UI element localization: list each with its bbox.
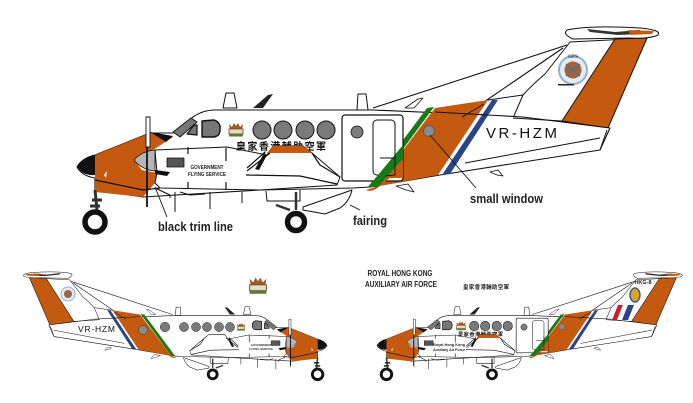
GFS tail badge: GFS — [568, 55, 578, 60]
callout: fairing: fairing — [353, 214, 387, 228]
tail badge — [61, 287, 75, 301]
Chinese heading: 皇家香港輔助空軍 — [463, 283, 509, 291]
wing orange panel — [267, 146, 312, 153]
callout: black trim line: black trim line — [158, 220, 233, 234]
Chinese title: 皇家香港輔助空軍 — [458, 330, 503, 338]
unit badge — [630, 288, 640, 302]
wording: FLYING SERVICE — [249, 347, 273, 351]
registration VR-HZM: VR-HZM — [486, 125, 557, 142]
registration: VR-HZM — [78, 324, 115, 334]
wording: Auxiliary Air Force — [433, 348, 465, 352]
small crown — [237, 323, 245, 331]
wording — [249, 343, 273, 351]
separate crest decal — [250, 278, 266, 294]
heading: Royal Hong Kong Auxiliary Air Force: AUXILIARY AIR FORCE — [365, 280, 438, 289]
GFS tail badge — [558, 55, 587, 86]
wording — [433, 343, 465, 352]
crest — [229, 123, 243, 136]
callout: fairing — [350, 205, 387, 228]
Chinese fuselage title: 皇家香港輔助空軍 — [236, 138, 326, 153]
RAF flash — [612, 305, 634, 320]
lower left aircraft: GFS facing right — [23, 272, 327, 380]
heading: Royal Hong Kong Auxiliary Air Force — [365, 269, 438, 289]
callout: small window: small window — [470, 192, 543, 206]
callout: small window — [430, 135, 543, 206]
wording: Royal Hong Kong — [433, 343, 465, 347]
fuselage wording — [188, 165, 226, 178]
fuselage wording: FLYING SERVICE — [188, 172, 226, 178]
main aircraft: Government Flying Service side view — [77, 27, 659, 232]
callout: black trim line — [155, 187, 233, 234]
fuselage wording: GOVERNMENT — [190, 165, 224, 171]
crest — [456, 321, 466, 330]
wording: GOVERNMENT — [251, 343, 272, 347]
wing orange panel — [477, 334, 500, 338]
port side windows — [138, 322, 235, 334]
heading: Royal Hong Kong Auxiliary Air Force: ROYAL HONG KONG — [368, 269, 432, 278]
HKG-8 serial: HKG-8 — [634, 280, 652, 286]
lower right aircraft: Royal Hong Kong Auxiliary Air Force — [377, 272, 682, 380]
